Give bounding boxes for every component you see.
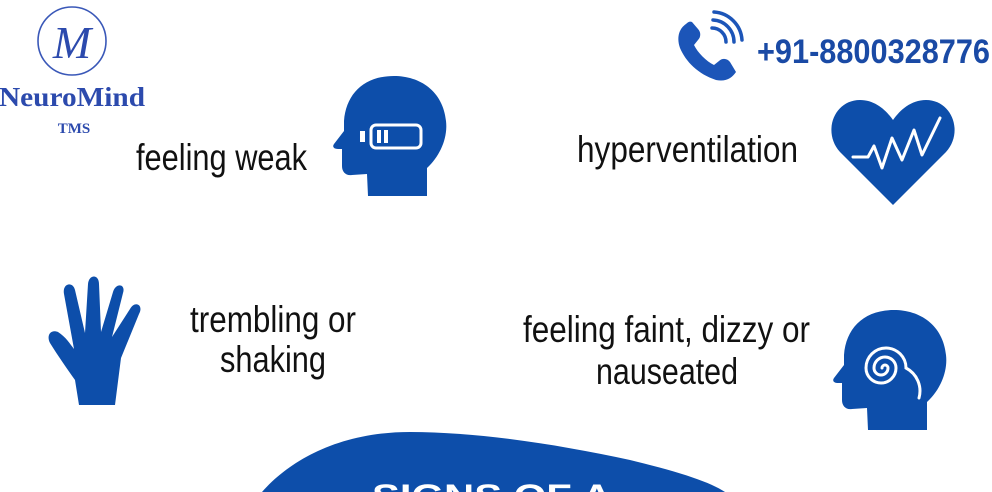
logo: M [52, 17, 94, 68]
icon: hand [49, 276, 140, 405]
text: trembling or shaking: shaking [220, 339, 326, 380]
logo [0, 7, 145, 137]
text: feeling faint, dizzy or nauseated [523, 309, 810, 392]
icon: phone [678, 12, 742, 81]
text: feeling faint, dizzy or nauseated: feeling faint, dizzy or [523, 309, 810, 350]
icon: head with spiral [833, 310, 946, 430]
icon: heart with pulse [831, 100, 955, 205]
text: trembling or shaking [190, 299, 356, 380]
text: feeling weak: feeling weak [136, 137, 307, 178]
logo: NeuroMind [0, 82, 145, 112]
text: hyperventilation: hyperventilation [577, 129, 798, 170]
icon: head with battery [333, 76, 446, 196]
banner blob with title [262, 432, 725, 492]
logo: TMS [58, 121, 90, 137]
text: feeling faint, dizzy or nauseated: nauseated [596, 351, 738, 392]
text: trembling or shaking: trembling or [190, 299, 356, 340]
